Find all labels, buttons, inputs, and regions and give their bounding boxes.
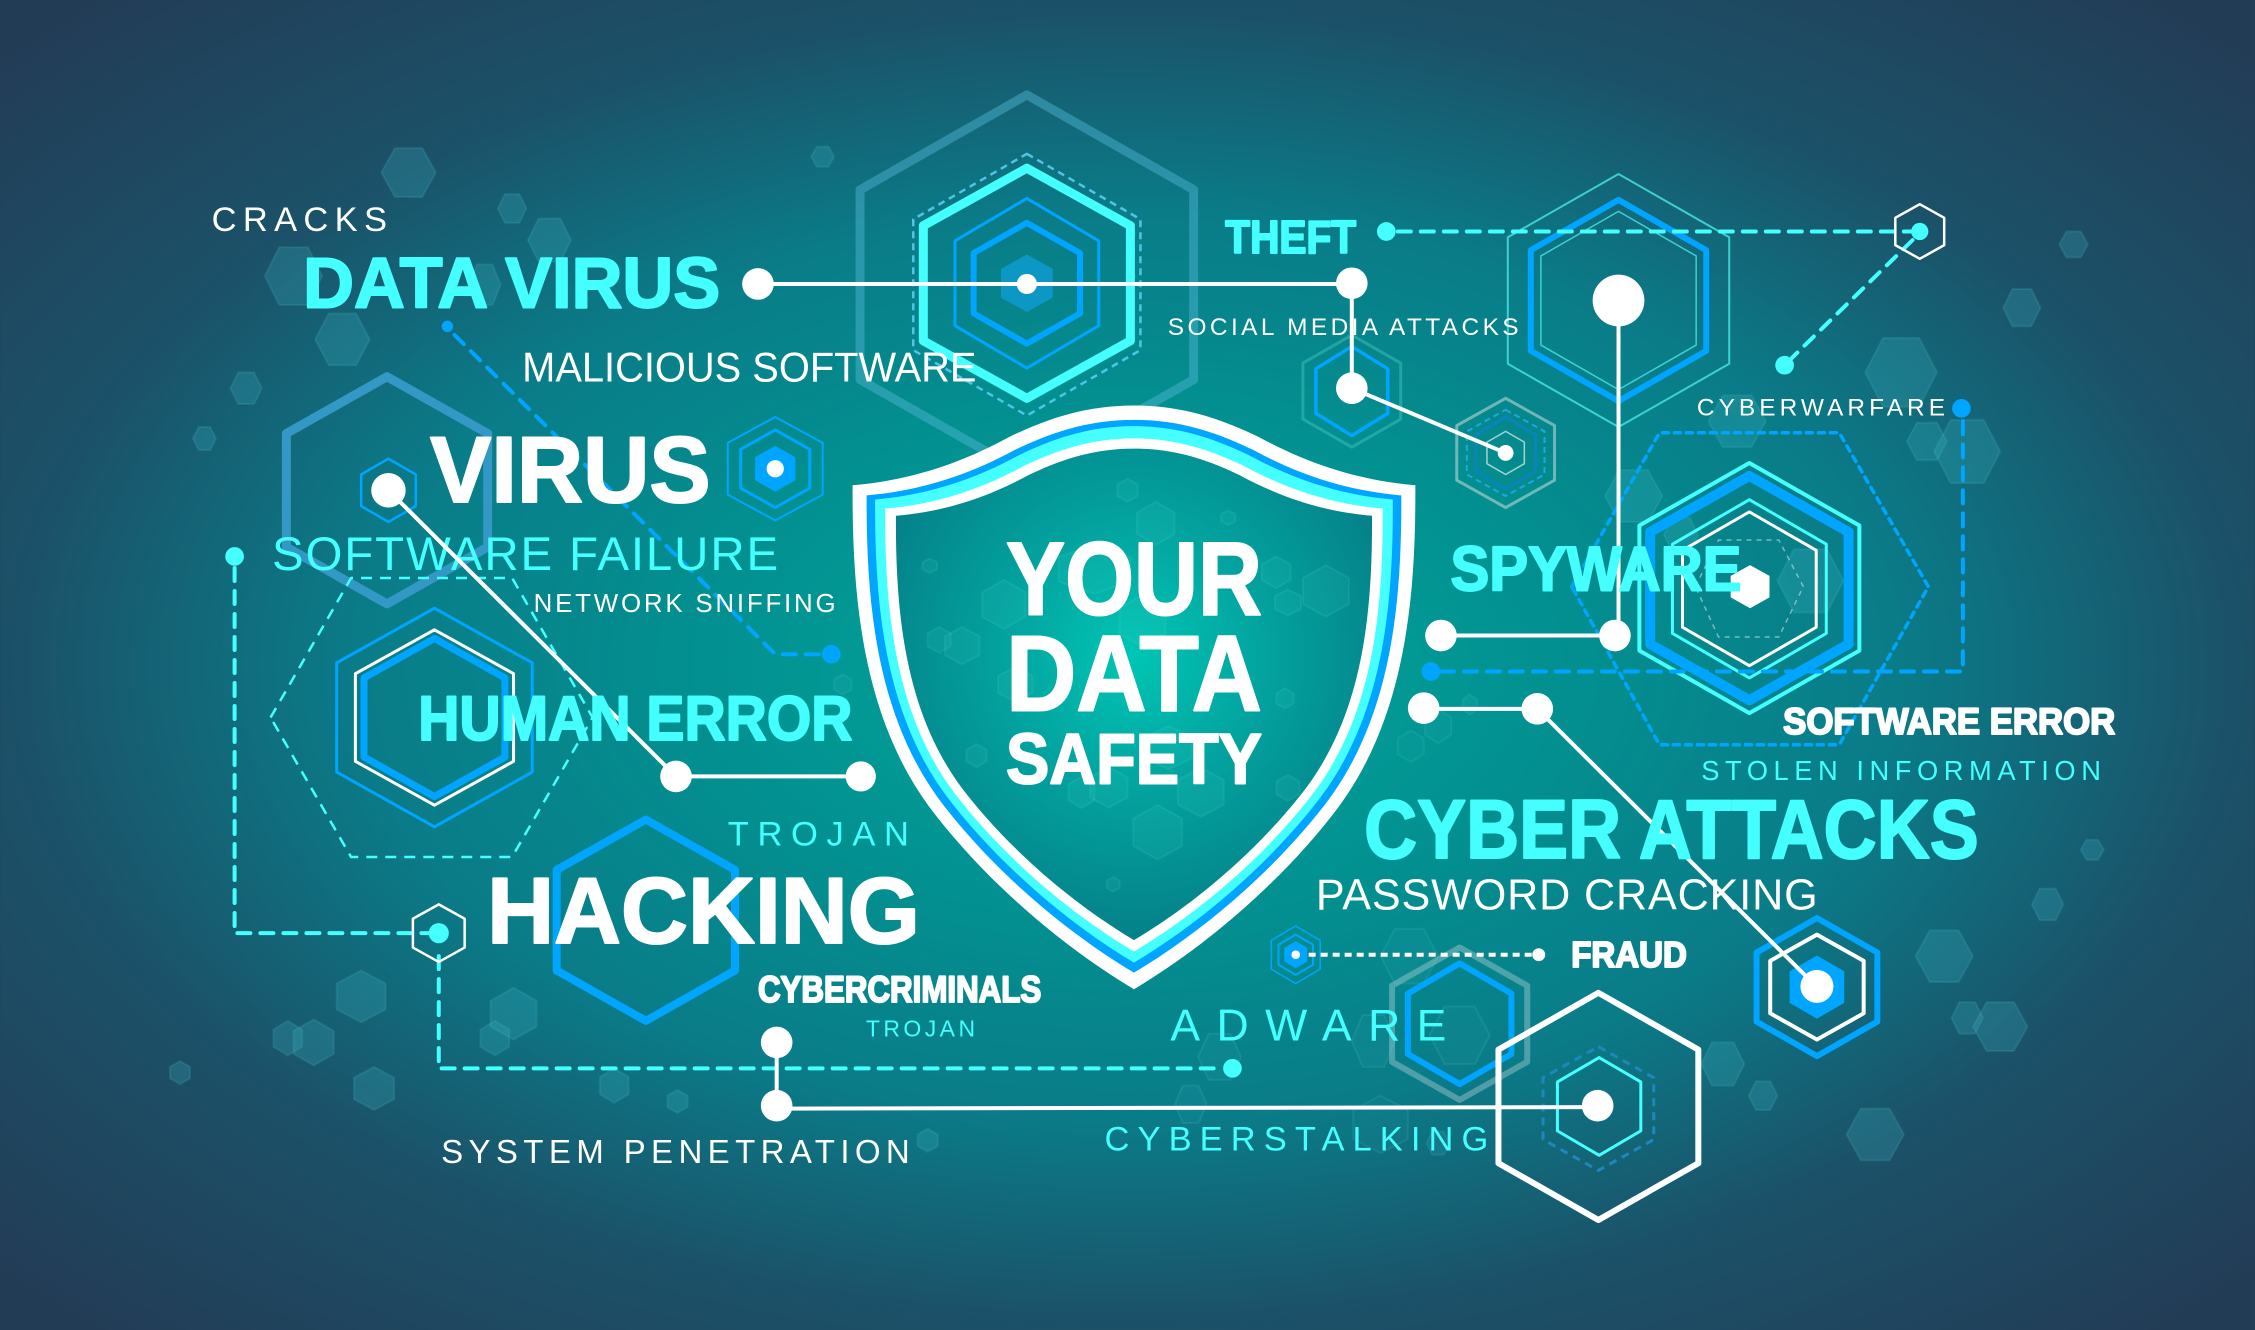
text: malicious software: MALICIOUS SOFTWARE (522, 344, 977, 391)
text: stolen information: STOLEN INFORMATION (1701, 755, 2101, 786)
text: trojan: TROJAN (728, 815, 909, 853)
title: your data safety: DATA (1006, 612, 1262, 733)
text: social media attacks: SOCIAL MEDIA ATTACKS (1168, 314, 1519, 341)
hexagon cluster: theft (1508, 174, 1729, 427)
title: your data safety: YOUR (1006, 521, 1262, 637)
text: data virus: DATA VIRUS (303, 244, 720, 324)
hexagon: small white node (413, 904, 465, 962)
hexagon cluster: adware (1392, 948, 1527, 1100)
hexagon cluster: human error (271, 578, 593, 857)
icon: fraud badge with dotted line (1271, 926, 1545, 983)
text: hacking: HACKING (487, 858, 920, 963)
text: adware: ADWARE (1170, 1002, 1446, 1051)
hexagon cluster: cyberstalking (1498, 993, 1698, 1220)
decorative hexagons inside shield (923, 479, 1349, 891)
decorative background hexagons (170, 147, 2104, 1160)
text: software failure: SOFTWARE FAILURE (272, 528, 778, 581)
title: your data safety (1006, 521, 1262, 800)
white connector network (371, 267, 1833, 1122)
title: your data safety: SAFETY (1006, 720, 1262, 800)
hexagon cluster: data virus (860, 95, 1194, 474)
dashed connector: cyan left network (235, 568, 1222, 1068)
text: software error: SOFTWARE ERROR (1783, 700, 2115, 742)
hexagon cluster: cyber attacks node (1757, 918, 1877, 1056)
text: network sniffing: NETWORK SNIFFING (534, 590, 836, 618)
text: human error: HUMAN ERROR (418, 684, 852, 754)
hexagon cluster: spyware (1572, 433, 1928, 745)
text: cyberwarfare: CYBERWARFARE (1697, 395, 1945, 422)
hexagons: social media nodes (1303, 335, 1555, 508)
icon: virus badge (728, 417, 823, 520)
dashed connector: blue right (1422, 399, 1971, 681)
dashed connector: blue virus line (455, 335, 820, 654)
text: theft: THEFT (1225, 211, 1356, 263)
text: cyberstalking: CYBERSTALKING (1104, 1120, 1488, 1158)
text: trojan small: TROJAN (866, 1016, 975, 1042)
text: system penetration: SYSTEM PENETRATION (441, 1134, 910, 1171)
text: cracks: CRACKS (212, 201, 387, 239)
hexagon: virus large outline (286, 377, 488, 604)
shield (853, 405, 1415, 989)
text: password cracking: PASSWORD CRACKING (1316, 872, 1818, 920)
node: cyberwarfare top right (1377, 204, 1944, 375)
dashed connector: theft and cyberwarfare (1398, 231, 1913, 358)
connector dots: left (225, 321, 1242, 1078)
text: fraud: FRAUD (1571, 934, 1687, 975)
text: virus: VIRUS (430, 417, 711, 522)
text: cyber attacks: CYBER ATTACKS (1364, 783, 1979, 876)
text: spyware: SPYWARE (1450, 535, 1741, 605)
hexagon: hacking (557, 820, 735, 1021)
text: cybercriminals: CYBERCRIMINALS (758, 968, 1041, 1010)
